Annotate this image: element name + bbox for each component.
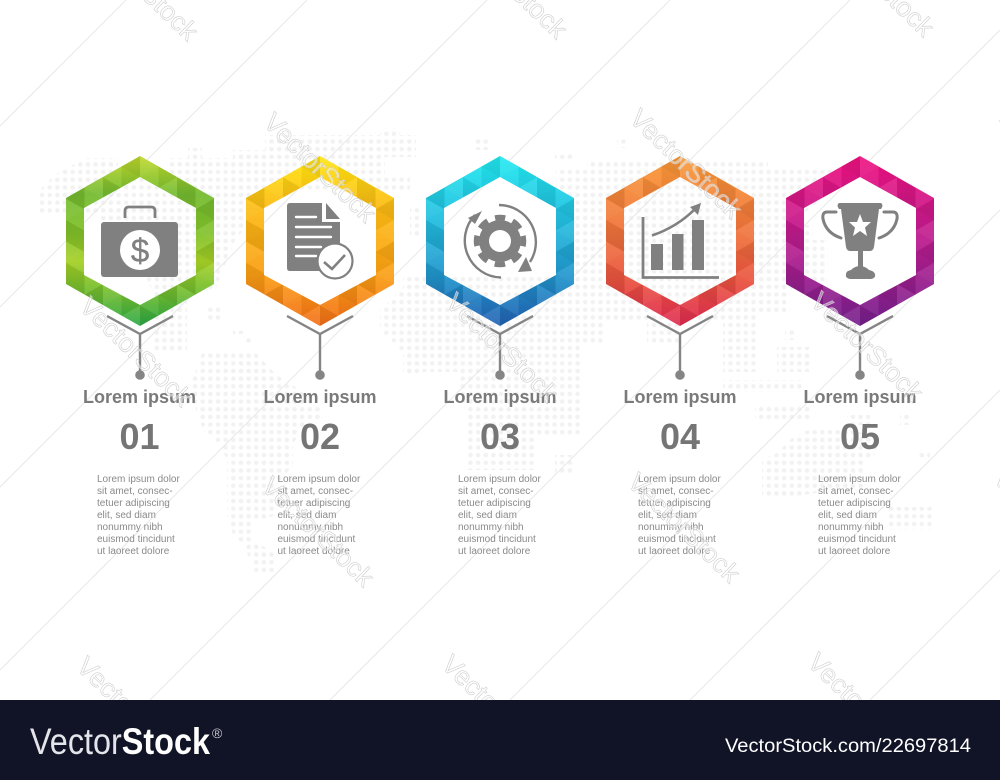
body text 5: tetuer adipiscing [818, 498, 891, 509]
icon: rising bar chart [643, 203, 719, 278]
hexagon 2 [246, 156, 394, 326]
heading 1: Lorem ipsum [83, 387, 196, 407]
VectorStock watermarks: VectorStock [436, 649, 561, 771]
body text 5: ut laoreet dolore [818, 546, 891, 557]
hexagon 3 [426, 156, 574, 326]
body text 2: elit, sed diam [278, 510, 336, 521]
body text 3: elit, sed diam [458, 510, 517, 521]
step 1: briefcase [66, 156, 214, 557]
footer banner [0, 700, 1000, 780]
body text 2: Lorem ipsum dolor [278, 474, 361, 485]
heading 4: Lorem ipsum [623, 387, 737, 407]
body text 4: tetuer adipiscing [638, 498, 711, 509]
registered mark: ® [212, 725, 223, 741]
icon: document with check [287, 203, 352, 278]
hexagon 5 [786, 156, 934, 326]
body text 4: ut laoreet dolore [638, 546, 711, 557]
connector 4 [647, 316, 713, 379]
body text 4: Lorem ipsum dolor [638, 474, 721, 485]
body text 4: sit amet, consec- [638, 486, 714, 497]
body text 1: sit amet, consec- [97, 486, 173, 497]
body text 3: ut laoreet dolore [458, 546, 531, 557]
body text 3: Lorem ipsum dolor [458, 474, 541, 485]
body text 5: sit amet, consec- [818, 486, 894, 497]
body text 1: elit, sed diam [97, 510, 156, 521]
icon: gear with rotating arrows [465, 205, 536, 278]
hexagon 1 [66, 156, 214, 326]
body text 2: ut laoreet dolore [278, 546, 350, 557]
step 2: document [246, 156, 394, 557]
connector 5 [827, 316, 893, 379]
footer image id: VectorStock.com/22697814 [725, 736, 971, 757]
heading 2: Lorem ipsum [263, 387, 377, 407]
VectorStock watermarks: VectorStock [74, 291, 199, 413]
body text 3: tetuer adipiscing [458, 498, 531, 509]
VectorStock watermarks: VectorStock [622, 467, 747, 589]
VectorStock watermarks: VectorStock [805, 286, 930, 408]
heading 3: Lorem ipsum [443, 387, 557, 407]
number 1: 01 [119, 416, 160, 457]
dotted world map [40, 128, 933, 572]
step 5: trophy [786, 156, 934, 557]
body text 2: nonummy nibh [278, 522, 343, 533]
body text 4: nonummy nibh [638, 522, 704, 533]
body text 5: euismod tincidunt [818, 534, 896, 545]
body text 4: euismod tincidunt [638, 534, 716, 545]
icon: briefcase with dollar [101, 207, 178, 277]
step 3: gear [426, 156, 574, 557]
body text 2: euismod tincidunt [278, 534, 356, 545]
body text 2: tetuer adipiscing [278, 498, 350, 509]
connector 1 [107, 316, 173, 379]
number 4: 04 [660, 416, 700, 457]
icon: trophy with star [823, 203, 897, 279]
body text 5: nonummy nibh [818, 522, 884, 533]
body text 1: euismod tincidunt [97, 534, 175, 545]
hexagon 4 [606, 156, 754, 326]
body text 2: sit amet, consec- [278, 486, 353, 497]
body text 5: elit, sed diam [818, 510, 877, 521]
VectorStock watermarks: VectorStock [802, 647, 927, 769]
VectorStock watermarks: VectorStock [258, 107, 383, 229]
number 5: 05 [840, 416, 880, 457]
VectorStock watermarks: VectorStock [440, 287, 565, 409]
connector 3 [467, 316, 533, 379]
footer logo: VectorStock [30, 721, 210, 762]
body text 3: nonummy nibh [458, 522, 524, 533]
body text 3: sit amet, consec- [458, 486, 534, 497]
body text 1: ut laoreet dolore [97, 546, 170, 557]
VectorStock watermarks: VectorStock [256, 471, 381, 593]
body text 1: nonummy nibh [97, 522, 163, 533]
body text 4: elit, sed diam [638, 510, 697, 521]
number 3: 03 [480, 416, 520, 457]
body text 5: Lorem ipsum dolor [818, 474, 901, 485]
VectorStock watermarks: VectorStock [624, 103, 749, 225]
heading 5: Lorem ipsum [803, 387, 917, 407]
body text 1: Lorem ipsum dolor [97, 474, 180, 485]
VectorStock watermarks: VectorStock [71, 651, 196, 773]
body text 3: euismod tincidunt [458, 534, 536, 545]
icon: briefcase with dollar: $ [131, 232, 149, 269]
number 2: 02 [300, 416, 340, 457]
body text 1: tetuer adipiscing [97, 498, 170, 509]
connector 2 [287, 316, 353, 379]
step 4: chart [606, 156, 754, 557]
